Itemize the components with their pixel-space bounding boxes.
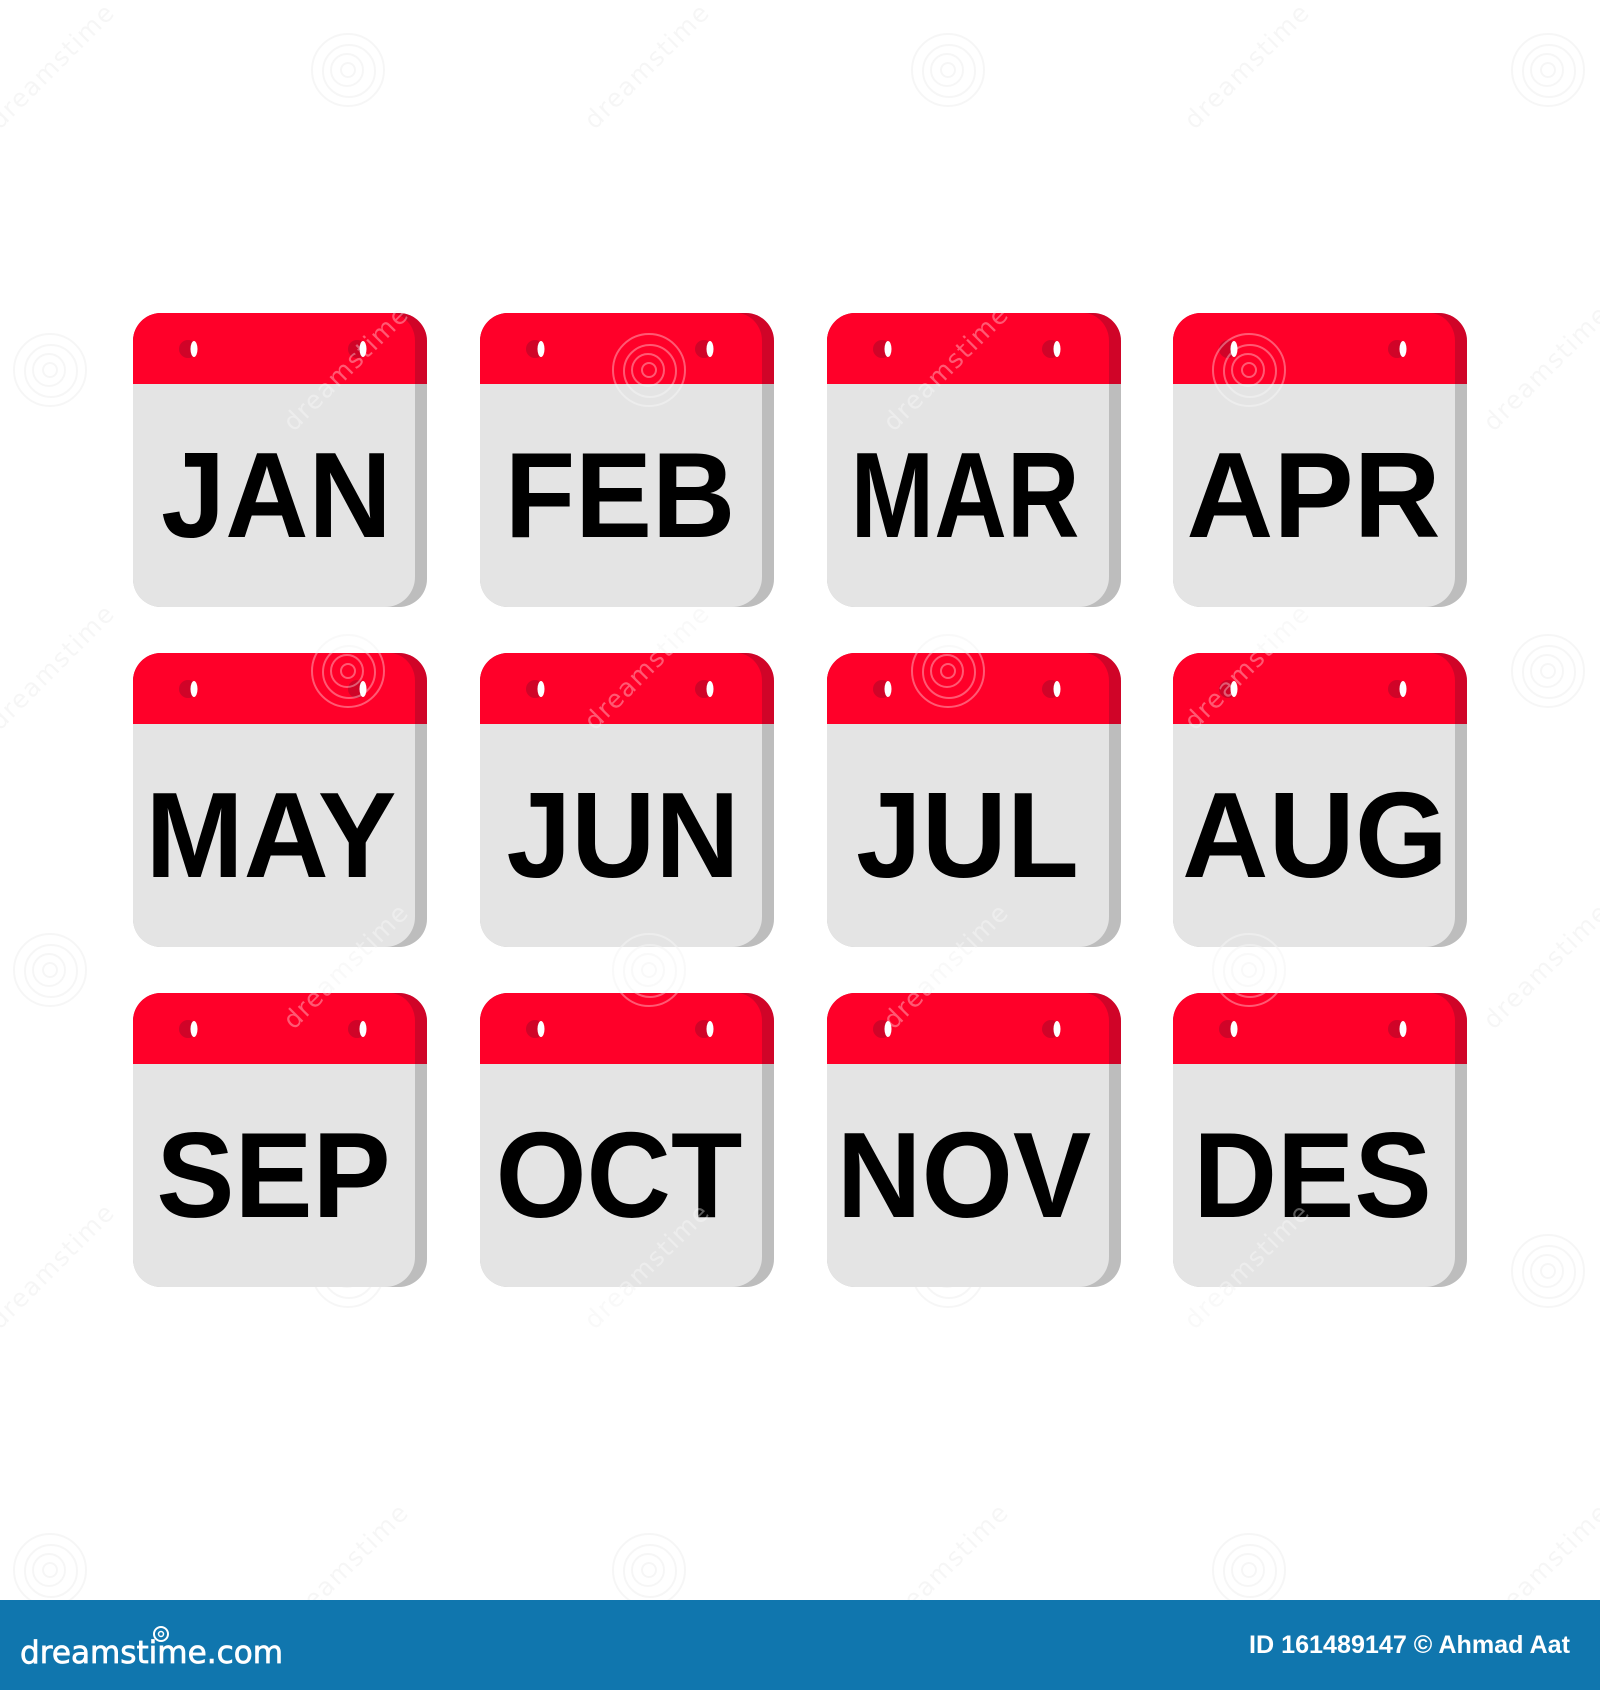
calendar icon: AUG: AUG [1182,767,1448,903]
watermark text on background: dreamstime [578,598,716,736]
calendar icon: SEP [133,993,427,1287]
calendar icon: APR [1173,313,1467,607]
watermark spirals over icons [312,334,1285,1006]
calendar icon: AUG [1173,653,1467,947]
watermark text on background: dreamstime [877,897,1015,1035]
calendar icon: FEB: FEB [505,428,735,564]
watermark text on background: dreamstime [277,897,415,1035]
calendar icon: JUN [480,653,774,947]
watermark text on background: dreamstime [1178,0,1316,135]
calendar icon: MAY [133,653,427,947]
calendar icon: JUN: JUN [506,768,740,904]
watermark text on background: dreamstime [1178,598,1316,736]
footer image id and credit: ID 161489147 © Ahmad Aat [1249,1631,1571,1659]
watermark text over icons: dreamstime [578,1197,716,1335]
calendar icon: OCT [480,993,774,1287]
watermark text over icons: dreamstime [578,598,716,736]
calendar icon: JAN: JAN [161,428,392,564]
watermark text over icons: dreamstime [1178,598,1316,736]
watermark text on background: dreamstime [1178,1197,1316,1335]
calendar icon: JAN [133,313,427,607]
calendar icon: MAR: MAR [851,427,1079,563]
watermark text on background: dreamstime [877,299,1015,437]
calendar icon: SEP: SEP [156,1108,391,1244]
calendar icon: NOV: NOV [837,1108,1091,1243]
watermark text over icons: dreamstime [877,299,1015,437]
watermark text over icons: dreamstime [877,897,1015,1035]
calendar icon: JUL [827,653,1121,947]
calendar icon: OCT: OCT [496,1108,742,1244]
calendar icon: DES [1173,993,1467,1287]
calendar icon: FEB [480,313,774,607]
calendar icon: APR: APR [1186,426,1441,563]
calendar icon: DES: DES [1193,1107,1432,1244]
watermark text on background: dreamstime [277,1497,415,1635]
calendar icon: MAR [827,313,1121,607]
watermark text over icons: dreamstime [1178,1197,1316,1335]
calendar icon: NOV [827,993,1121,1287]
watermark text over icons: dreamstime [277,897,415,1035]
watermark text over icons: dreamstime [277,299,415,437]
watermark text over icons [277,299,1316,1335]
watermark text on background: dreamstime [877,1497,1015,1635]
calendar icon: JUL: JUL [856,767,1079,903]
footer logo: dreamstime.com [20,1635,283,1671]
watermark text on background: dreamstime [578,1197,716,1335]
watermark text on background: dreamstime [578,0,716,135]
footer bar [0,1600,1600,1690]
calendar icon: MAY: MAY [145,767,397,903]
watermark text on background: dreamstime [277,299,415,437]
